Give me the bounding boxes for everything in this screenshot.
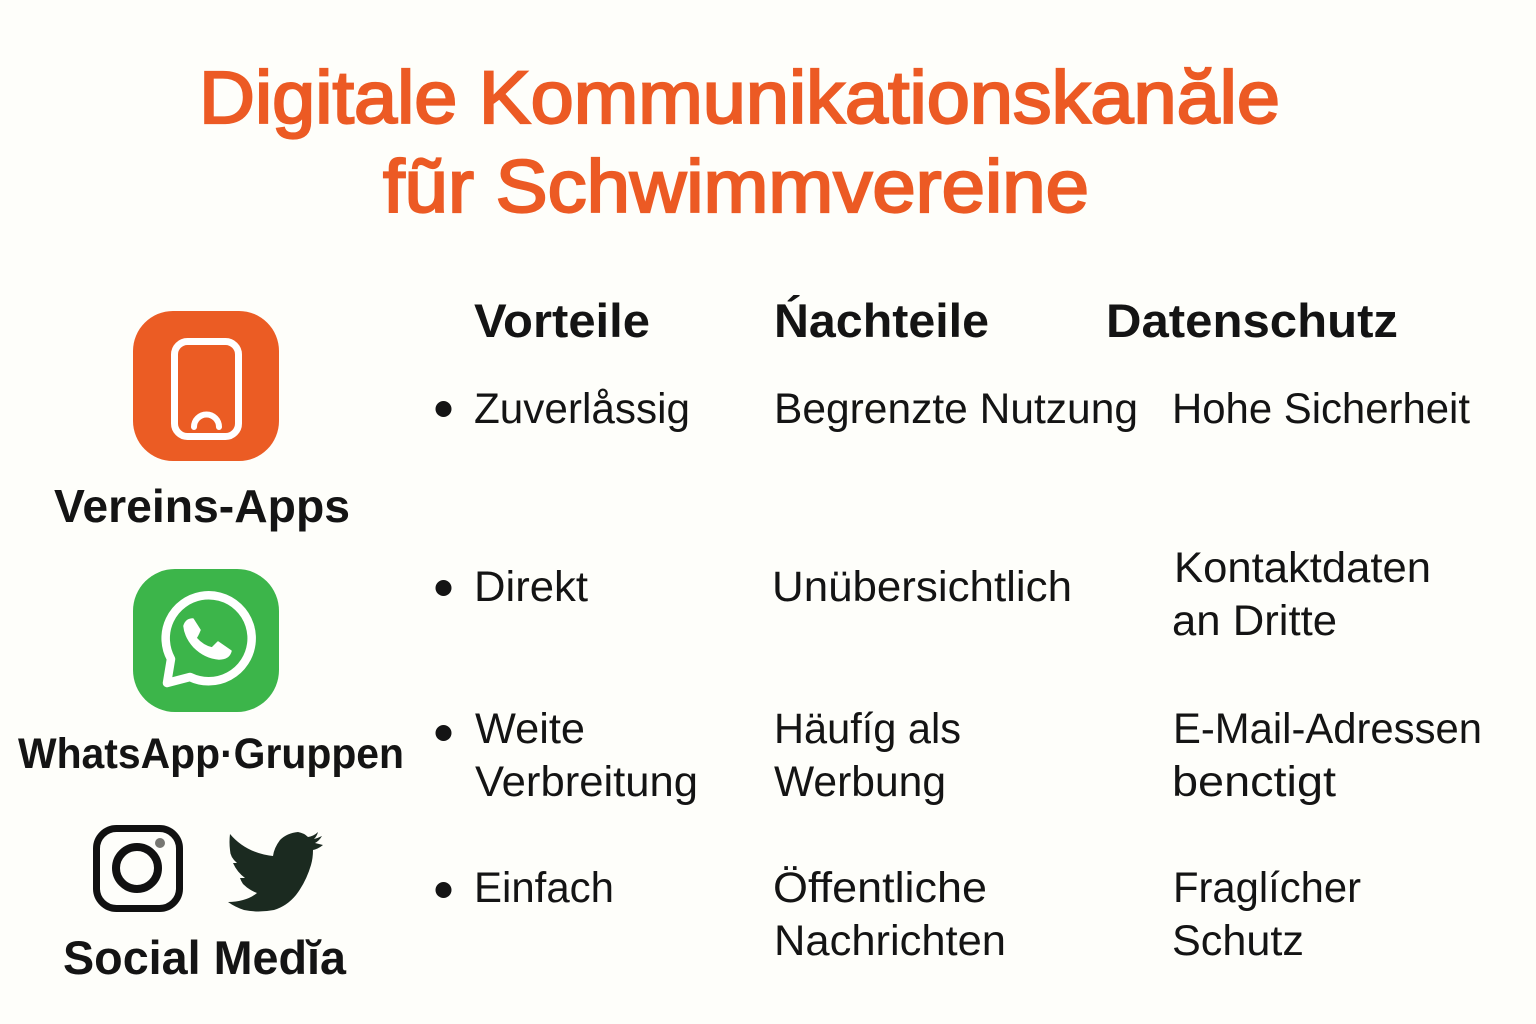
Nachteil	[774, 705, 961, 806]
Vorteil: Einfach	[474, 864, 614, 912]
column headings: Vorteile	[474, 294, 650, 347]
Datenschutz: Kontaktdaten	[1174, 544, 1431, 592]
Datenschutz: an Dritte	[1172, 597, 1337, 645]
column headings: Ńachteile	[774, 294, 989, 347]
Nachteil: Öffentliche	[773, 864, 987, 912]
icon: Twitter bird	[228, 832, 323, 912]
icon: Instagram	[96, 828, 180, 908]
Datenschutz: Fraglícher	[1173, 864, 1361, 912]
Datenschutz: benctigt	[1172, 758, 1336, 806]
Nachteil: Unübersichtlich	[772, 563, 1072, 611]
column headings	[474, 294, 1398, 347]
bullet	[436, 401, 452, 417]
Nachteil: Begrenzte Nutzung	[774, 385, 1138, 433]
title: fũr Schwimmvereine	[383, 145, 1089, 228]
bullet	[436, 580, 452, 596]
Datenschutz	[1172, 544, 1431, 645]
Nachteil	[773, 864, 1006, 965]
Datenschutz	[1172, 705, 1482, 806]
label: Social Media: Social Medĭa	[63, 931, 347, 984]
Vorteil	[475, 705, 698, 806]
Datenschutz: Schutz	[1172, 917, 1304, 965]
Vorteil: Verbreitung	[475, 758, 698, 806]
icon: app phone	[133, 311, 279, 461]
Vorteil: Weite	[475, 705, 585, 753]
channel: WhatsApp-Gruppen	[18, 569, 404, 778]
row: Vereins-Apps	[436, 385, 1470, 433]
Vorteil: Direkt	[474, 563, 588, 611]
row: WhatsApp-Gruppen	[436, 544, 1431, 645]
row: Social Media, first	[436, 705, 1482, 806]
column headings: Datenschutz	[1106, 294, 1398, 347]
Vorteil: Zuverlåssig	[474, 385, 690, 433]
row: Social Media, second	[436, 864, 1361, 965]
icon: WhatsApp	[133, 569, 279, 712]
channel: Vereins-Apps	[54, 311, 350, 532]
Datenschutz: E-Mail-Adressen	[1173, 705, 1482, 753]
Datenschutz	[1172, 864, 1361, 965]
Nachteil: Nachrichten	[774, 917, 1006, 965]
bullet	[436, 882, 452, 898]
title	[199, 56, 1280, 228]
Nachteil: Werbung	[774, 758, 946, 806]
bullet	[436, 725, 452, 741]
title: Digitale Kommunikationskanăle	[199, 56, 1280, 139]
Datenschutz: Hohe Sicherheit	[1172, 385, 1470, 433]
label: WhatsApp-Gruppen: WhatsApp·Gruppen	[18, 730, 404, 778]
Nachteil: Häufíg als	[774, 705, 961, 753]
channel: Social Media	[63, 828, 347, 984]
label: Vereins-Apps: Vereins-Apps	[54, 480, 350, 532]
